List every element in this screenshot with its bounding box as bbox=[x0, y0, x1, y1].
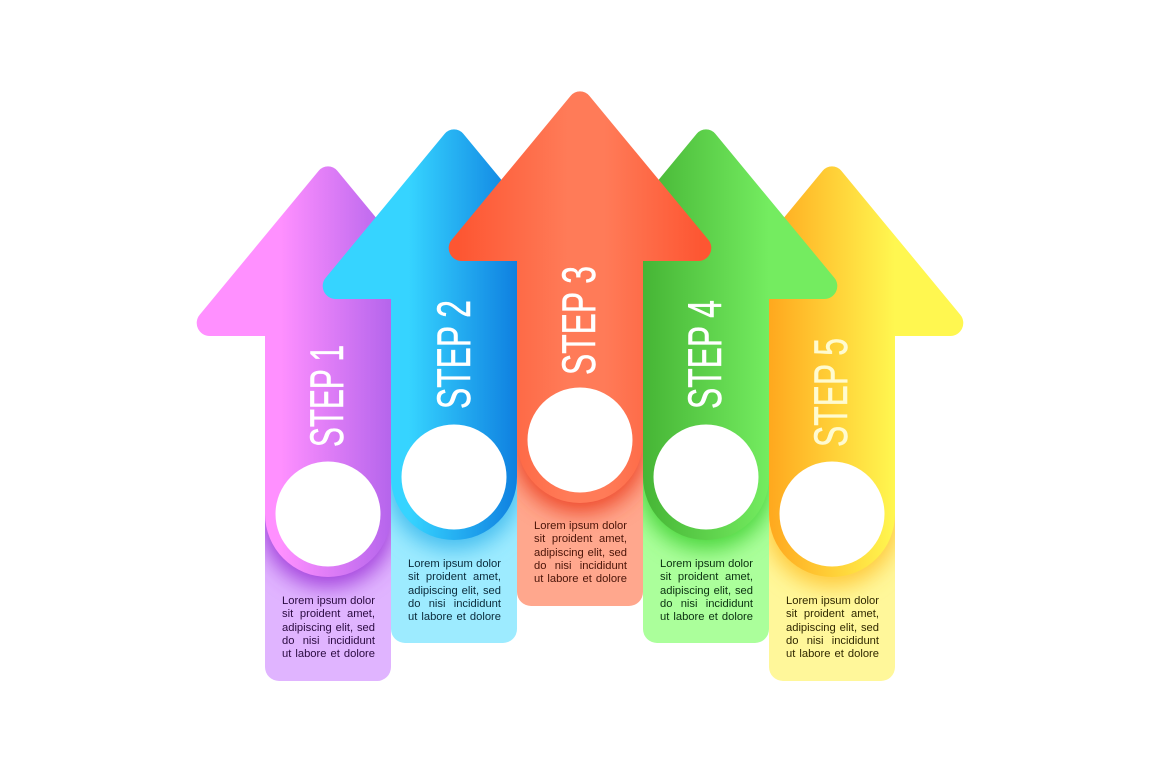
arrow body: step 3 bbox=[449, 91, 711, 439]
text panel: step 4 bbox=[643, 449, 769, 643]
body text: step 3: ut labore et dolore bbox=[534, 573, 627, 585]
arrow: step 3 bbox=[449, 91, 711, 606]
body text: step 4: Lorem ipsum dolor bbox=[660, 558, 753, 570]
body text: step 2: sit proident amet, bbox=[408, 571, 501, 583]
body text: step 1: ut labore et dolore bbox=[282, 648, 375, 660]
white circle: step 5 bbox=[780, 462, 884, 566]
ring: step 2 bbox=[391, 414, 517, 540]
arrow body: step 4 bbox=[575, 129, 837, 477]
body text: step 5: sit proident amet, bbox=[786, 608, 879, 620]
body text: step 2: Lorem ipsum dolor bbox=[408, 558, 501, 570]
arrow: step 1 bbox=[196, 166, 391, 681]
body text: step 5: Lorem ipsum dolor bbox=[786, 595, 879, 607]
body text: step 2: ut labore et dolore bbox=[408, 611, 501, 623]
body text: step 4: sit proident amet, bbox=[660, 571, 753, 583]
body text: step 3: sit proident amet, bbox=[534, 533, 627, 545]
white circle: step 2 bbox=[402, 424, 506, 530]
arrow body: step 1 bbox=[197, 166, 459, 514]
body text: step 2: adipiscing elit, sed bbox=[408, 585, 501, 597]
arrow: step 4 bbox=[643, 129, 838, 643]
body text: step 2 bbox=[408, 558, 501, 628]
body text: step 5: do nisi incididunt bbox=[786, 635, 879, 647]
arrow body: step 5 bbox=[701, 166, 963, 514]
ring shadow: step 2 bbox=[391, 478, 517, 564]
body text: step 1: Lorem ipsum dolor bbox=[282, 595, 375, 607]
body text: step 3: Lorem ipsum dolor bbox=[534, 520, 627, 532]
arrow body: step 2 bbox=[323, 129, 585, 477]
body text: step 1: do nisi incididunt bbox=[282, 635, 375, 647]
body text: step 5 bbox=[786, 595, 879, 665]
text panel: step 2 bbox=[391, 449, 517, 643]
text panel: step 5 bbox=[769, 486, 895, 681]
text panel: step 3 bbox=[517, 411, 643, 606]
ring shadow: step 1 bbox=[265, 515, 391, 602]
ring: step 5 bbox=[769, 451, 895, 577]
body text: step 1: sit proident amet, bbox=[282, 608, 375, 620]
ring shadow: step 5 bbox=[769, 516, 895, 600]
body text: step 5: ut labore et dolore bbox=[786, 648, 879, 660]
label: step 2: STEP 2 bbox=[427, 300, 480, 409]
ring: step 3 bbox=[517, 377, 643, 503]
ring: step 4 bbox=[643, 414, 769, 540]
label: step 4: STEP 4 bbox=[678, 300, 731, 409]
body text: step 2: do nisi incididunt bbox=[408, 598, 501, 610]
text panel: step 1 bbox=[265, 486, 391, 681]
label: step 3: STEP 3 bbox=[552, 266, 605, 375]
ring shadow: step 3 bbox=[517, 442, 643, 528]
body text: step 3: do nisi incididunt bbox=[534, 560, 627, 572]
ring shadow: step 4 bbox=[643, 478, 769, 564]
body text: step 5: adipiscing elit, sed bbox=[786, 622, 879, 634]
white circle: step 4 bbox=[654, 424, 758, 530]
white circle: step 1 bbox=[276, 462, 380, 566]
body text: step 3 bbox=[534, 520, 627, 590]
white circle: step 3 bbox=[528, 388, 632, 492]
ring: step 1 bbox=[265, 451, 391, 577]
label: step 5: STEP 5 bbox=[804, 338, 857, 447]
body text: step 4 bbox=[660, 558, 753, 628]
body text: step 4: ut labore et dolore bbox=[660, 611, 753, 623]
arrow: step 2 bbox=[322, 129, 517, 643]
body text: step 1: adipiscing elit, sed bbox=[282, 622, 375, 634]
body text: step 3: adipiscing elit, sed bbox=[534, 547, 627, 559]
label: step 1: STEP 1 bbox=[300, 345, 353, 447]
body text: step 1 bbox=[282, 595, 375, 665]
body text: step 4: adipiscing elit, sed bbox=[660, 585, 753, 597]
body text: step 4: do nisi incididunt bbox=[660, 598, 753, 610]
arrow: step 5 bbox=[769, 166, 964, 681]
